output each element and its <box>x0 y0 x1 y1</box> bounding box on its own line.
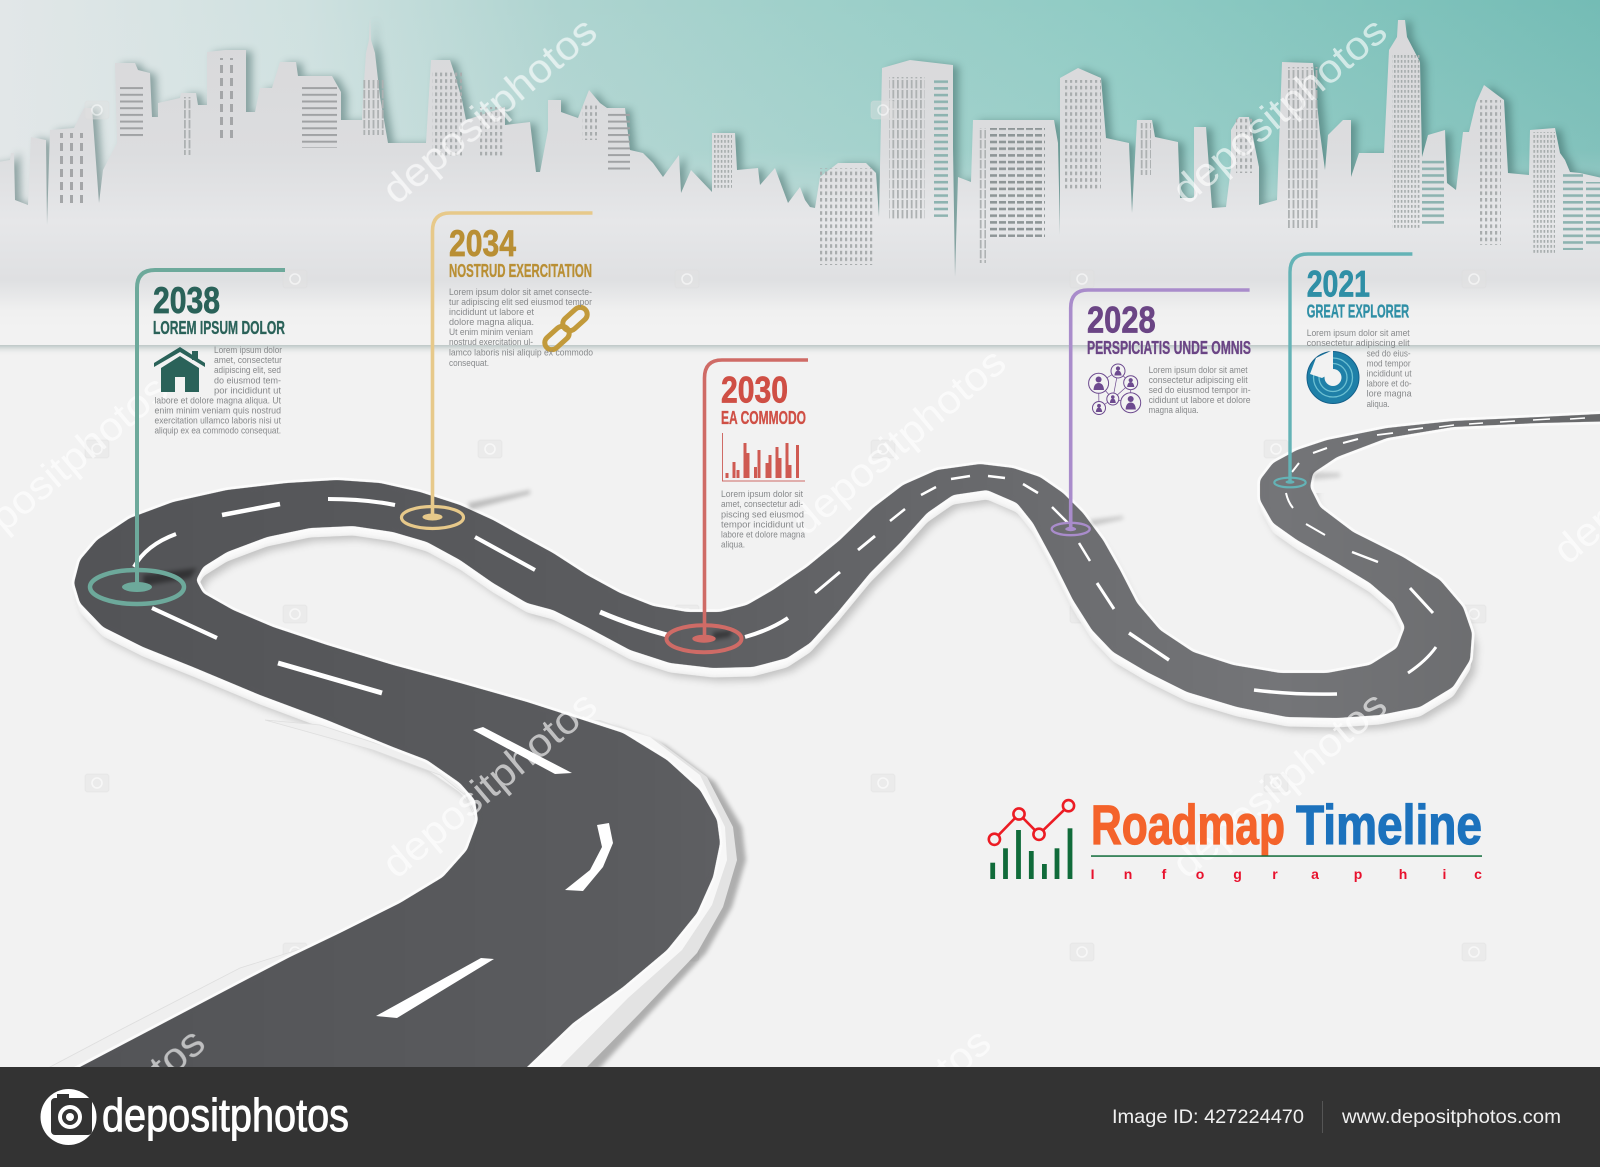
2034 body text: dolore magna aliqua. <box>449 317 534 327</box>
icon: radial ring chart <box>1307 350 1359 404</box>
2028 year: 2028 <box>1087 300 1156 341</box>
2028 body text: magna aliqua. <box>1149 405 1199 415</box>
watermark text: depositphotos <box>374 683 605 887</box>
2021 body text: sed do eius- <box>1367 348 1411 358</box>
2034 body text: incididunt ut labore et <box>449 307 535 317</box>
milestone 2021 <box>1274 254 1412 487</box>
watermark camera icons <box>85 101 1486 961</box>
background sky gradient <box>0 0 1600 300</box>
2028 body text: sed do eiusmod tempor in- <box>1149 385 1251 395</box>
2034 body text: consequat. <box>449 358 489 368</box>
marker shadows <box>143 472 1340 640</box>
2028 body text: consectetur adipiscing elit <box>1149 375 1248 385</box>
2021 body text: labore et do- <box>1367 378 1412 388</box>
2038 body text: aliquip ex ea commodo consequat. <box>154 425 281 435</box>
watermark text: depositphotos <box>1164 683 1395 887</box>
2030 body text: piscing sed eiusmod <box>721 509 804 519</box>
2021 heading: GREAT EXPLORER <box>1307 300 1409 321</box>
2021 body text: Lorem ipsum dolor sit amet <box>1307 328 1410 338</box>
2034 body text: Lorem ipsum dolor sit amet consecte- <box>449 287 592 297</box>
2034 year: 2034 <box>449 223 516 264</box>
icon: chain link <box>542 304 590 353</box>
2038 body text: do eiusmod tem- <box>214 375 281 385</box>
2038 body text: adipiscing elit, sed <box>214 365 281 375</box>
2030 body text: aliqua. <box>721 540 745 550</box>
2030 body text: labore et dolore magna <box>721 529 805 539</box>
2028 flag pole and ring <box>1052 290 1250 535</box>
2034 body text: tur adipiscing elit sed eiusmod tempor <box>449 297 592 307</box>
2038 body text: enim minim veniam quis nostrud <box>154 405 281 415</box>
paper-cut city skyline <box>0 17 1600 345</box>
footer bar <box>0 1067 1600 1167</box>
title: Roadmap: Roadmap <box>1091 793 1285 856</box>
footer image id: Image ID: 427224470 <box>1112 1107 1304 1128</box>
footer brand name: depositphotos <box>102 1089 349 1141</box>
2030 body text <box>721 489 805 550</box>
watermark text: depositphotos <box>783 340 1014 544</box>
2030 year: 2030 <box>721 370 788 411</box>
2030 heading: EA COMMODO <box>721 407 806 428</box>
2021 body text: consectetur adipiscing elit <box>1307 338 1410 348</box>
watermark text: depositphotos <box>374 9 605 213</box>
2038 body text <box>154 345 282 435</box>
milestone 2034 <box>402 213 593 528</box>
2038 body text: exercitation ullamco laboris nisi ut <box>154 415 282 425</box>
2028 body text <box>1149 365 1251 415</box>
2034 body text: lamco laboris nisi aliquip ex commodo <box>449 348 593 358</box>
icon: house <box>154 347 205 392</box>
subtitle: Infographic: Infographic <box>1091 866 1482 882</box>
2021 body text: mod tempor <box>1367 358 1411 368</box>
2034 heading: NOSTRUD EXERCITATION <box>449 260 592 281</box>
2021 body text: lore magna <box>1367 389 1412 399</box>
icon: bar chart <box>722 433 805 481</box>
2038 heading: LOREM IPSUM DOLOR <box>153 317 285 338</box>
2021 body text: aliqua. <box>1367 399 1390 409</box>
milestone 2038 <box>90 270 285 604</box>
large foreground dashes <box>376 727 613 1018</box>
2038 body text: por incididunt ut <box>214 385 282 395</box>
milestone 2030 <box>666 360 808 652</box>
2034 body text <box>449 287 593 368</box>
2021 body text <box>1307 328 1412 409</box>
2038 body text: Lorem ipsum dolor <box>214 345 282 355</box>
watermark text: depositphotos <box>1164 9 1395 213</box>
2034 flag pole and ring <box>402 213 592 528</box>
2038 body text: labore et dolore magna aliqua. Ut <box>154 395 282 405</box>
2034 body text: Ut enim minim veniam <box>449 327 533 337</box>
2028 body text: Lorem ipsum dolor sit amet <box>1149 365 1248 375</box>
2038 year: 2038 <box>153 280 220 321</box>
2030 body text: amet, consectetur adi- <box>721 499 803 509</box>
footer website: www.depositphotos.com <box>1341 1107 1561 1128</box>
icon: camera logo <box>40 1089 96 1145</box>
roadmap timeline title block <box>989 793 1482 882</box>
2028 heading: PERSPICIATIS UNDE OMNIS <box>1087 337 1251 358</box>
title underline <box>1091 855 1482 857</box>
2021 flag pole and ring <box>1274 254 1412 487</box>
2021 body text: incididunt ut <box>1367 368 1412 378</box>
2028 body text: cididunt ut labore et dolore <box>1149 395 1251 405</box>
lane dashes <box>134 418 1585 694</box>
2034 body text: nostrud exercitation ul- <box>449 337 533 347</box>
winding road <box>40 413 1600 1093</box>
2021 year: 2021 <box>1307 264 1370 305</box>
2038 body text: amet, consectetur <box>214 355 282 365</box>
milestone 2028 <box>1052 290 1251 535</box>
2038 flag pole and ring <box>90 270 285 604</box>
icon: people network <box>1089 364 1141 414</box>
2030 body text: tempor incididunt ut <box>721 519 805 529</box>
2030 flag pole and ring <box>666 360 808 652</box>
2030 body text: Lorem ipsum dolor sit <box>721 489 804 499</box>
title: Timeline: Timeline <box>1296 793 1482 856</box>
icon: growth chart <box>989 800 1074 879</box>
